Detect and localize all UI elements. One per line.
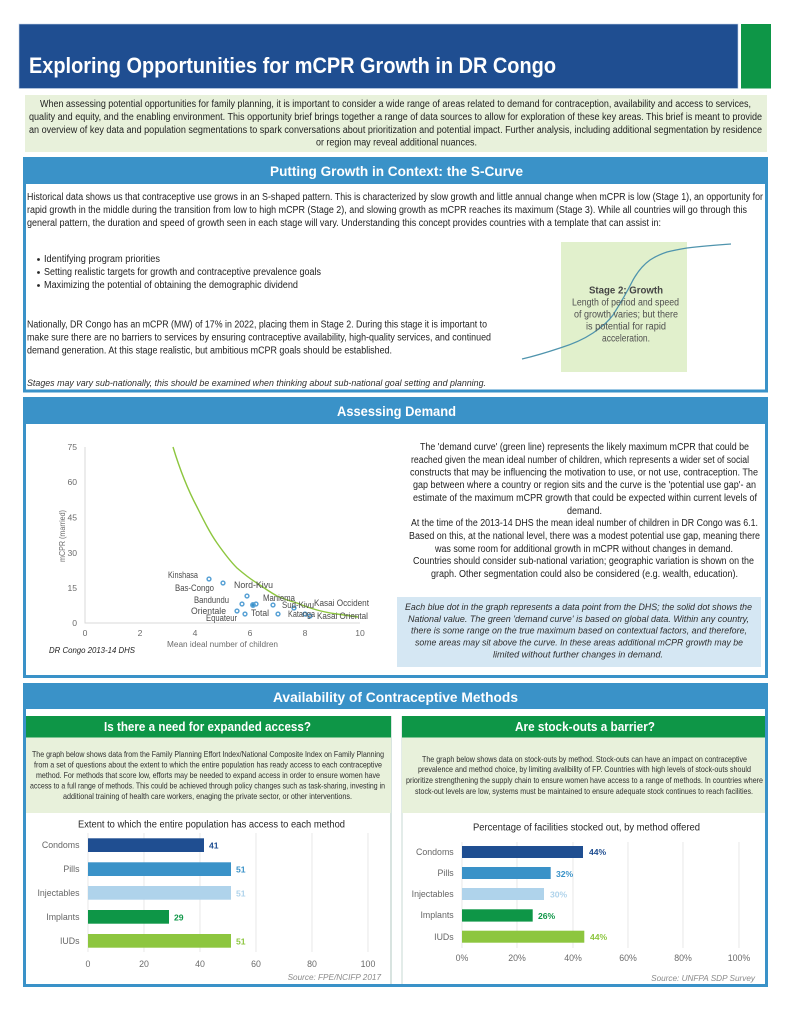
value labels: 44% — [589, 847, 607, 857]
x axis labels — [83, 628, 365, 638]
value labels: 26% — [538, 911, 556, 921]
panel: availability of contraceptive methods — [23, 683, 768, 986]
value labels — [538, 847, 608, 942]
text block: demand curve explanation — [409, 442, 760, 580]
text block: demand curve explanation: At the time of the 2013-14 DHS the mean ideal number of children in DR Congo was 6.1. — [411, 518, 758, 529]
callout: how to read the graph: some areas may sit above the curve. In these areas additional mCPR growth may be — [415, 636, 743, 648]
y axis labels: 45 — [67, 512, 77, 522]
value labels: 32% — [556, 869, 574, 879]
text block: demand curve explanation: demand. — [567, 506, 602, 517]
bar chart: stock-outs by method — [412, 822, 756, 983]
callout: how to read the graph — [397, 597, 761, 667]
category labels: Implants — [420, 910, 454, 920]
text block: expanded access explanation: method. For methods that score low, efforts may be needed to expand access in order to ensure women have — [36, 770, 380, 780]
demand curve — [173, 447, 358, 617]
title banner — [19, 24, 738, 88]
region labels: Maniema — [263, 593, 295, 603]
axis labels — [86, 959, 375, 969]
region labels: Bas-Congo — [175, 583, 214, 593]
title: Exploring Opportunities for mCPR Growth in DR Congo — [29, 53, 556, 78]
region labels — [168, 570, 370, 623]
chart source note: DR Congo 2013-14 DHS — [49, 645, 135, 655]
value labels: 51 — [236, 888, 246, 898]
intro text panel: or region may reveal additional nuances. — [316, 138, 477, 148]
value labels — [174, 840, 246, 946]
callout: how to read the graph: limited without further changes in demand. — [493, 648, 663, 660]
callout: how to read the graph: National value. The green 'demand curve' is based on global data. Within any country, — [408, 613, 749, 624]
source: Source: UNFPA SDP Survey — [651, 974, 756, 983]
value labels: 51 — [236, 936, 246, 946]
category labels — [37, 840, 80, 946]
bullet list: Identifying program priorities — [44, 254, 160, 265]
chart: demand curve scatter — [49, 442, 370, 655]
text block: national position: make sure there are no barriers to services by ensuring contraceptive availability, high-quality services, and continued — [27, 332, 491, 344]
note: sub-national stages: Stages may vary sub-nationally, this should be examined when thinking about sub-national goal setting and planning. — [27, 377, 486, 388]
region labels: Kasai Occident — [314, 598, 370, 608]
axis labels: 80 — [307, 959, 317, 969]
axis labels: 20% — [508, 953, 526, 963]
category labels: Pills — [63, 864, 80, 874]
region labels: Equateur — [206, 613, 237, 623]
x axis labels: 2 — [138, 628, 143, 638]
text block: national position — [27, 320, 491, 356]
chart title: Extent to which the entire population has access to each method — [78, 820, 345, 830]
value labels: 44% — [590, 932, 608, 942]
text block: demand curve explanation: reached given the mean ideal number of children, which represents a wider set of social — [411, 455, 749, 466]
y axis title: mCPR (married) — [57, 510, 67, 562]
heading: S-curve: Putting Growth in Context: the S-Curve — [270, 163, 523, 179]
text block: demand curve explanation: was some room for additional growth in mCPR without changes in demand. — [434, 544, 733, 555]
text block: demand curve explanation: constructs that may be influencing the motivation to use, or not use, contraception. The — [410, 468, 759, 479]
axis labels: 20 — [139, 959, 149, 969]
region labels: Sud-Kivu — [282, 600, 314, 610]
region labels: Katanga — [288, 609, 315, 619]
value labels: 41 — [209, 840, 219, 850]
axis labels: 40 — [195, 959, 205, 969]
bars — [88, 838, 231, 948]
axis labels: 0 — [86, 959, 91, 969]
x axis labels: 6 — [248, 628, 253, 638]
region labels: Kasai Oriental — [317, 611, 368, 621]
callout: how to read the graph: Each blue dot in the graph represents a data point from the DHS; the solid dot shows the — [405, 601, 752, 612]
stage 2 label: Stage 2: Growth — [589, 286, 663, 296]
bullet list: Maximizing the potential of obtaining the demographic dividend — [44, 280, 298, 291]
text block: expanded access explanation: from a set of questions about the extent to which the entire population has ready access to each contraceptive — [34, 760, 382, 770]
axis labels: 100 — [361, 959, 375, 969]
chart: S-curve diagram — [522, 242, 731, 372]
subheading: stock-outs: Are stock-outs a barrier? — [515, 719, 655, 734]
value labels: 51 — [236, 864, 246, 874]
panel: stock-outs — [402, 716, 765, 984]
stage 2 label — [572, 286, 679, 344]
region labels: Nord-Kivu — [234, 580, 273, 590]
y axis labels: 60 — [67, 477, 77, 487]
text block: S-curve explanation — [27, 192, 764, 229]
category labels: Injectables — [37, 888, 80, 898]
axis labels: 0% — [456, 953, 469, 963]
region labels: Bandundu — [194, 595, 229, 605]
axis labels: 100% — [728, 953, 750, 963]
callout: how to read the graph: there is some range on the true maximum based on contextual factors, and therefore, — [411, 624, 747, 636]
text block: national position: demand generation. At this stage realistic, but ambitious mCPR goals should be established. — [27, 346, 392, 356]
x axis labels: 8 — [303, 628, 308, 638]
subheading: expanded access — [26, 716, 391, 738]
x axis title: Mean ideal number of children — [167, 639, 278, 649]
bar chart: access by method — [37, 820, 381, 982]
x axis labels: 4 — [193, 628, 198, 638]
axis labels: 40% — [564, 953, 582, 963]
S curve line — [522, 244, 731, 359]
y axis labels: 15 — [67, 583, 77, 593]
stage 2 label: Length of period and speed — [572, 298, 679, 308]
panel: S-curve context — [23, 157, 768, 391]
text block: S-curve explanation: general pattern, the duration and speed of growth seen in each stage will vary. Understanding this concept provides countries with a template that can assist in: — [27, 218, 661, 229]
category labels: IUDs — [434, 932, 454, 942]
panel: assessing demand — [23, 397, 768, 676]
subheading: expanded access: Is there a need for expanded access? — [104, 719, 311, 734]
panel: expanded access — [26, 716, 391, 984]
stage 2 box — [561, 242, 687, 372]
text block: demand curve explanation: gap between where a country or region sits and the curve is the 'potential use gap'- an — [413, 480, 756, 491]
region labels: Kinshasa — [168, 570, 198, 580]
value labels: 30% — [550, 890, 568, 900]
text block: demand curve explanation: Countries should consider sub-national variation; geographic variation is shown on the — [413, 556, 755, 567]
green accent block — [741, 24, 771, 88]
value labels: 29 — [174, 912, 184, 922]
category labels: Condoms — [42, 840, 80, 850]
x axis labels: 0 — [83, 628, 88, 638]
text block: demand curve explanation: Based on this, at the national level, there was a modest potential use gap, meaning there — [409, 531, 760, 542]
heading: assessing demand: Assessing Demand — [337, 403, 456, 419]
category labels: Pills — [438, 868, 454, 878]
x axis labels: 10 — [355, 628, 365, 638]
axis labels: 60% — [619, 953, 637, 963]
text block: expanded access explanation: access to a full range of methods. This could be achieved through policy changes such as task-sharing, investing in — [30, 780, 385, 790]
text block: national position: Nationally, DR Congo has an mCPR (MW) of 17% in 2022, placing them in Stage 2. During this stage it is important to — [27, 320, 487, 330]
axis labels — [456, 953, 750, 963]
category labels: Condoms — [416, 847, 454, 857]
y axis labels: 0 — [72, 618, 77, 628]
stage 2 label: of growth varies; but there — [574, 310, 678, 320]
source: Source: FPE/NCIFP 2017 — [288, 973, 381, 982]
region labels: Orientale — [191, 606, 226, 616]
intro text panel — [25, 95, 767, 152]
y axis labels: 75 — [67, 442, 77, 452]
category labels: IUDs — [60, 936, 80, 946]
text block: stock-outs explanation — [402, 738, 765, 813]
stage 2 label: acceleration. — [602, 334, 650, 344]
category labels: Injectables — [412, 889, 454, 899]
stage 2 label: is potential for rapid — [586, 322, 666, 332]
heading: availability: Availability of Contraceptive Methods — [273, 689, 518, 705]
text block: expanded access explanation: additional training of health care workers, enaging the private sector, or other interventions. — [63, 791, 352, 801]
bullet list — [37, 254, 321, 291]
axis labels: 60 — [251, 959, 261, 969]
bars — [462, 846, 584, 943]
text block: demand curve explanation: graph. Other segmentation could also be considered (e.g. wealth, education). — [431, 569, 738, 580]
category labels — [412, 847, 454, 942]
chart title: Percentage of facilities stocked out, by method offered — [473, 822, 700, 834]
y axis labels — [67, 442, 77, 628]
y axis labels: 30 — [67, 548, 77, 558]
bullet list: Setting realistic targets for growth and contraceptive prevalence goals — [44, 267, 321, 278]
axis labels: 80% — [674, 953, 692, 963]
subheading: stock-outs — [402, 716, 765, 738]
category labels: Implants — [46, 912, 80, 922]
data points — [207, 577, 312, 618]
text block: expanded access explanation — [26, 738, 391, 813]
text block: demand curve explanation: estimate of the maximum mCPR growth that could be expected within current levels of — [413, 493, 757, 504]
text block: demand curve explanation: The 'demand curve' (green line) represents the likely maximum mCPR that could be — [420, 442, 749, 453]
region labels: Total — [251, 608, 269, 618]
text block: expanded access explanation: The graph below shows data from the Family Planning Effort Index/National Composite Index on Family Planning — [32, 749, 384, 759]
